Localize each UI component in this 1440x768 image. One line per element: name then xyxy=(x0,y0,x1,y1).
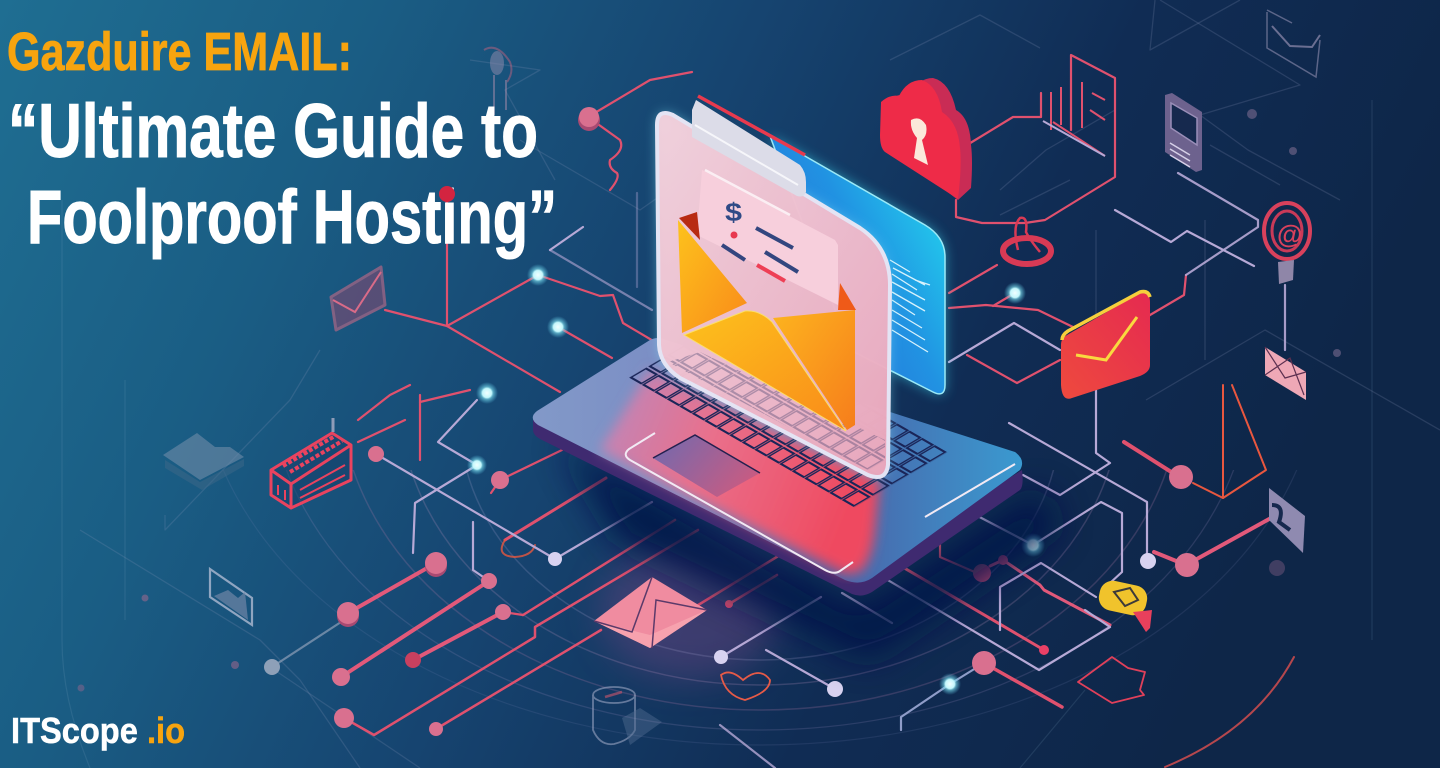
purple haze near pink envelope xyxy=(600,540,780,680)
icon: at sign xyxy=(1264,203,1310,284)
trackpad top edge xyxy=(653,435,760,473)
screen rear panel xyxy=(770,136,945,394)
envelope left flap xyxy=(678,220,747,333)
faint background lines top right xyxy=(890,0,1440,576)
icon: red keyboard block xyxy=(271,418,351,508)
screen reflection on deck xyxy=(600,370,880,574)
icon: outline heart xyxy=(721,672,770,700)
faint vertical lines xyxy=(62,100,1372,768)
icon: red cloud lock xyxy=(880,78,972,200)
icon: faint lock pin xyxy=(484,48,511,115)
title line 3: Foolproof Hosting” xyxy=(27,175,557,260)
icon: red outline puzzle xyxy=(1078,657,1145,703)
letter sheet xyxy=(697,170,838,305)
folder tab stripe xyxy=(698,96,805,155)
title line 2: “Ultimate Guide to xyxy=(8,89,538,174)
icon: check envelope xyxy=(1061,292,1150,399)
envelope inner right xyxy=(838,283,856,310)
laptop base edge xyxy=(533,420,1023,596)
icon: triangle envelope xyxy=(1269,488,1305,553)
circuit nodes: glowing xyxy=(467,264,1156,697)
laptop xyxy=(533,322,1060,660)
brand logo: ITScope .io xyxy=(11,710,185,751)
keyhole xyxy=(911,118,928,165)
icon: yellow tag xyxy=(1096,578,1152,632)
faint circuit rings xyxy=(226,470,1297,768)
envelope right pocket xyxy=(773,310,855,430)
red node over title xyxy=(439,186,455,202)
rear panel text lines xyxy=(890,260,930,352)
laptop shadow xyxy=(560,440,1060,660)
faint background lines left xyxy=(78,60,740,768)
cloud side xyxy=(890,78,972,200)
icon: faint database cylinder xyxy=(593,687,662,745)
dollar sign: $ xyxy=(725,197,743,227)
letter pin mark xyxy=(730,232,738,238)
circuit traces: lavender xyxy=(272,173,1285,768)
icon: link ring xyxy=(1003,218,1051,264)
letter top edge xyxy=(705,170,790,215)
icon: faint folder xyxy=(163,433,244,490)
keyboard xyxy=(628,322,948,508)
rear panel glow xyxy=(770,136,945,394)
folder tab xyxy=(692,100,806,196)
rear panel xyxy=(770,136,945,394)
circuit traces: red xyxy=(344,55,1266,735)
deck highlight lines xyxy=(626,433,1015,573)
circuit traces: thick pink xyxy=(341,518,1271,677)
icon: pink small envelope xyxy=(1265,347,1306,400)
laptop deck xyxy=(533,338,1022,583)
letter red line xyxy=(757,265,785,281)
icon: at sign: @ xyxy=(1277,219,1302,249)
trackpad xyxy=(653,435,760,497)
front panel xyxy=(657,113,890,477)
cloud face xyxy=(880,80,961,199)
folder tab inner line xyxy=(695,125,798,185)
icon: left envelope outline xyxy=(331,267,385,330)
front panel glow xyxy=(657,113,890,477)
screen front panel with envelope xyxy=(657,96,890,477)
letter navy lines xyxy=(722,228,798,272)
icon: top right envelope outline xyxy=(1267,10,1320,77)
icon: pink open envelope xyxy=(594,577,707,648)
title line 1: Gazduire EMAIL: xyxy=(7,22,352,82)
icon: picture frame xyxy=(210,569,252,625)
circuit nodes: pink xyxy=(264,107,1199,736)
icon: bar chart document xyxy=(1043,82,1105,156)
icon: purple device xyxy=(1165,93,1202,172)
envelope front flap xyxy=(684,311,846,431)
keys seen through panel xyxy=(668,352,885,470)
envelope inner xyxy=(679,212,700,240)
